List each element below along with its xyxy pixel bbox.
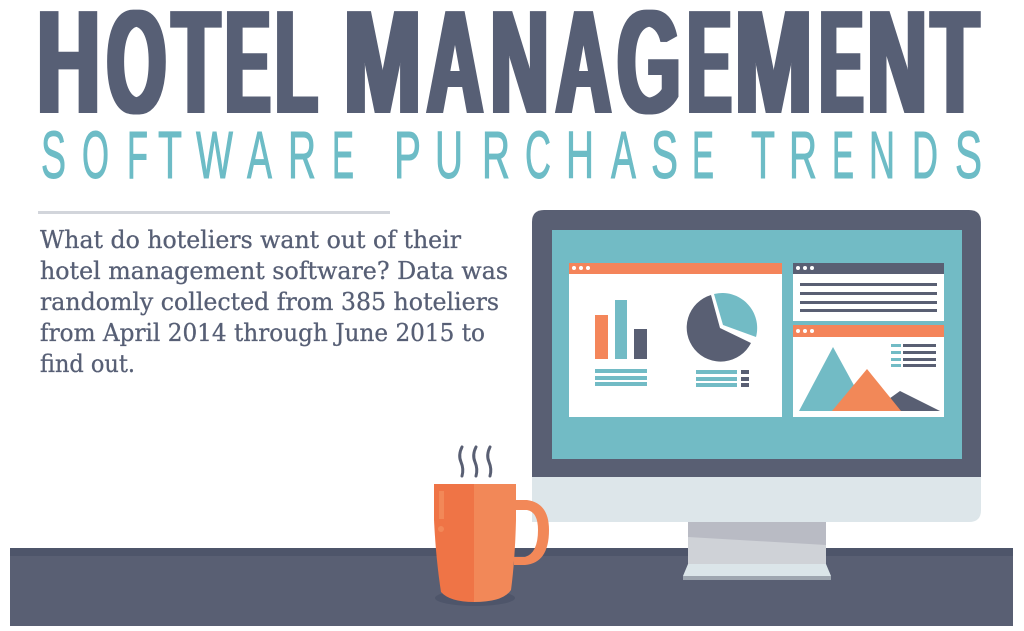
subtitle: F [127,118,148,193]
intro text: hotel management software? Data was [40,257,508,285]
monitor bezel [532,210,981,477]
panel: bar and pie charts [569,263,782,417]
monitor chin [532,470,981,522]
subtitle [41,118,982,193]
icon: coffee mug [434,447,549,606]
subtitle: W [196,118,233,193]
subtitle: R [288,118,316,193]
subtitle: T [751,118,775,193]
subtitle: P [394,118,421,193]
intro text: find out. [40,350,135,378]
intro text: randomly collected from 385 hoteliers [40,288,499,316]
subtitle: E [692,118,714,193]
divider rule [38,211,390,214]
subtitle: N [869,118,895,193]
subtitle: R [789,118,817,193]
subtitle: T [158,118,182,193]
subtitle: U [435,118,463,193]
panel: area chart [793,325,944,417]
subtitle: C [525,118,551,193]
intro text [40,226,508,378]
bar chart [595,300,647,386]
subtitle: S [955,118,982,193]
subtitle: E [332,118,354,193]
monitor [532,210,981,580]
monitor screen [552,230,962,459]
subtitle: H [566,118,594,193]
intro text: from April 2014 through June 2015 to [40,319,485,347]
subtitle: A [247,118,272,193]
subtitle: O [82,118,109,193]
subtitle: S [41,118,66,193]
intro text: What do hoteliers want out of their [40,226,462,254]
subtitle: R [482,118,510,193]
subtitle: E [832,118,854,193]
monitor stand [683,522,831,580]
subtitle: S [651,118,678,193]
pie chart [687,293,757,387]
icon: steam [460,447,491,476]
desk [10,548,1013,626]
subtitle: A [611,118,636,193]
title [37,0,979,145]
subtitle: D [912,118,938,193]
panel: text list [793,263,944,321]
